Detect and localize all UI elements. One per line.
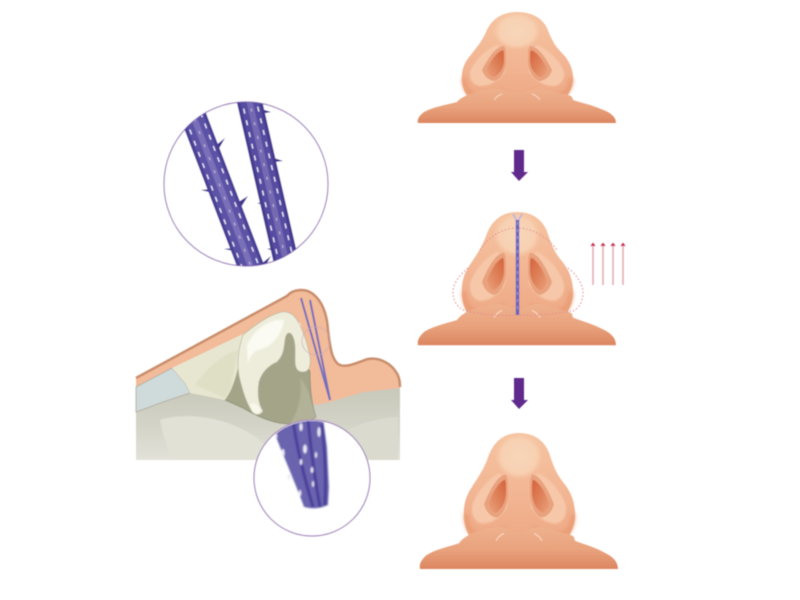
lens circle <box>254 420 370 536</box>
thread strand right <box>241 95 294 267</box>
nostrils <box>482 253 552 295</box>
bone segment <box>136 368 190 412</box>
illustration: nose cross-section <box>136 289 400 460</box>
magnified view: thread tip <box>254 418 370 536</box>
thread bundle <box>274 418 329 508</box>
upper lip base <box>418 304 616 345</box>
skin layer <box>136 289 400 405</box>
magnified view: barbed threads <box>162 100 330 268</box>
thread strand left <box>184 112 264 266</box>
thread implant <box>513 214 522 315</box>
upper cartilage <box>172 333 245 400</box>
alar cartilage <box>238 312 310 415</box>
lift direction arrows <box>590 242 626 285</box>
upper lip base <box>420 527 618 569</box>
nose body and alae <box>462 12 573 101</box>
nostrils <box>484 475 554 518</box>
nose body and alae <box>464 433 575 542</box>
magnifier target ring <box>302 327 330 355</box>
arrow: second step down <box>511 378 528 409</box>
thread barbs behind strands <box>201 107 283 272</box>
underlying tissue <box>136 380 400 460</box>
septal cartilage <box>225 325 316 424</box>
illustration: nose during thread lift <box>418 212 616 345</box>
thread strands in section <box>301 298 330 400</box>
illustration: nose before treatment <box>418 12 616 123</box>
illustration: nose after treatment <box>420 433 618 569</box>
upper lip base <box>418 89 616 123</box>
nostrils <box>482 46 552 81</box>
nose body and alae <box>462 212 573 319</box>
dotted outline of lift zones <box>453 228 583 315</box>
arrow: first step down <box>511 150 528 181</box>
lens circle <box>164 102 328 266</box>
